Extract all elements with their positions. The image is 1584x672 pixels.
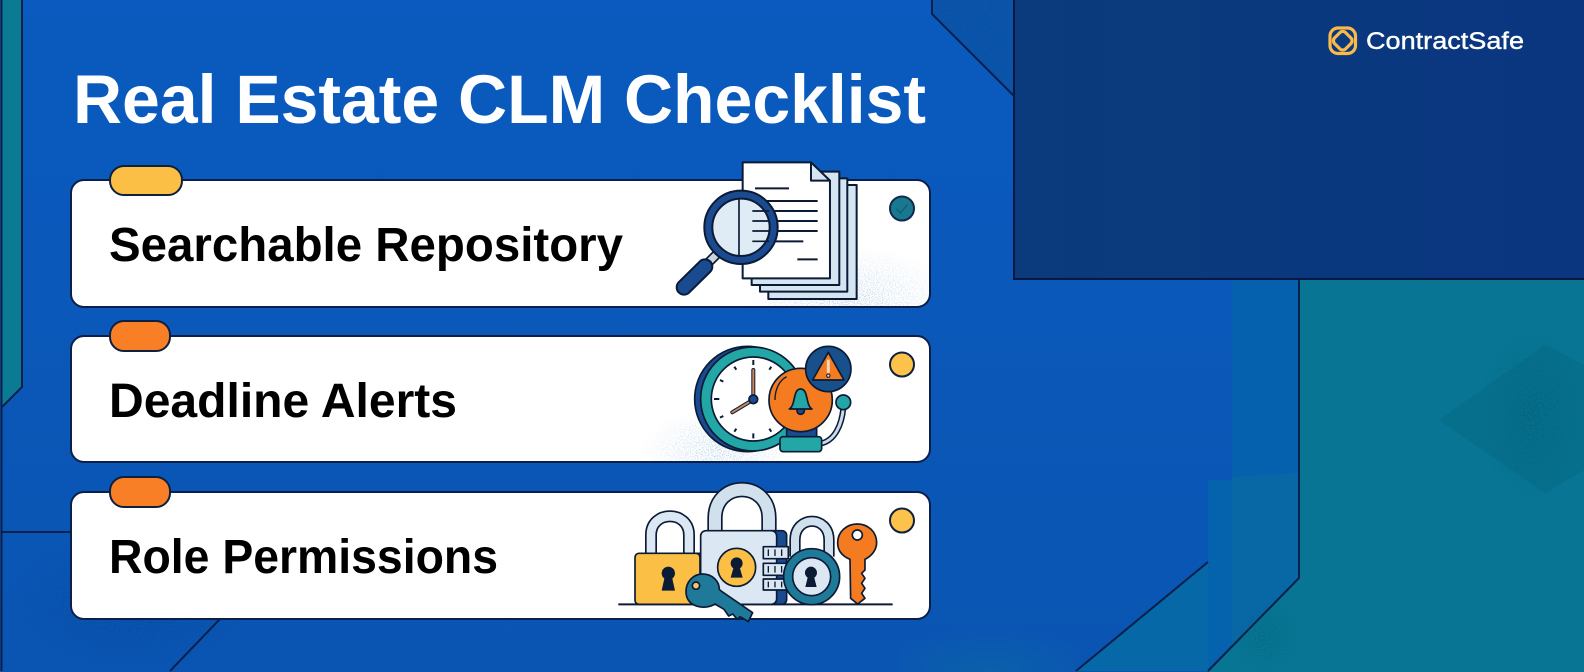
speckle texture [760, 253, 929, 306]
small yellow padlock [635, 516, 707, 604]
status dot: yellow [890, 352, 914, 376]
logo wordmark: ContractSafe [1366, 28, 1524, 55]
faint diamond shape [1439, 330, 1584, 500]
navy panel: upper right [1014, 0, 1584, 279]
panel: Role Permissions [71, 477, 930, 622]
heading: Searchable Repository: Searchable Repository [109, 219, 623, 272]
orange key [838, 524, 877, 604]
round teal padlock [784, 521, 840, 605]
panel: Deadline Alerts [70, 320, 931, 463]
heading: Deadline Alerts: Deadline Alerts [109, 375, 457, 428]
tab: orange [110, 321, 170, 351]
large padlock [701, 490, 788, 604]
icon: documents and magnifier [684, 162, 857, 299]
teal key [686, 574, 753, 622]
logo: ContractSafe [1330, 28, 1524, 55]
status dot: yellow [890, 508, 914, 532]
title: Real Estate CLM Checklist [73, 61, 926, 138]
status dot: teal check [890, 196, 914, 220]
panel: Searchable Repository [70, 161, 931, 308]
teal band: left edge [2, 0, 22, 407]
icon: padlocks and keys [618, 490, 893, 622]
outline strokes [2, 0, 1208, 671]
heading: Role Permissions: Role Permissions [109, 531, 498, 584]
icon: logo mark [1330, 28, 1356, 54]
icon: clock and alarm bell [695, 346, 851, 452]
speckle texture [652, 416, 788, 461]
teal panel: lower right [1208, 279, 1584, 672]
tab: orange [110, 477, 170, 507]
tab: yellow [110, 166, 182, 195]
